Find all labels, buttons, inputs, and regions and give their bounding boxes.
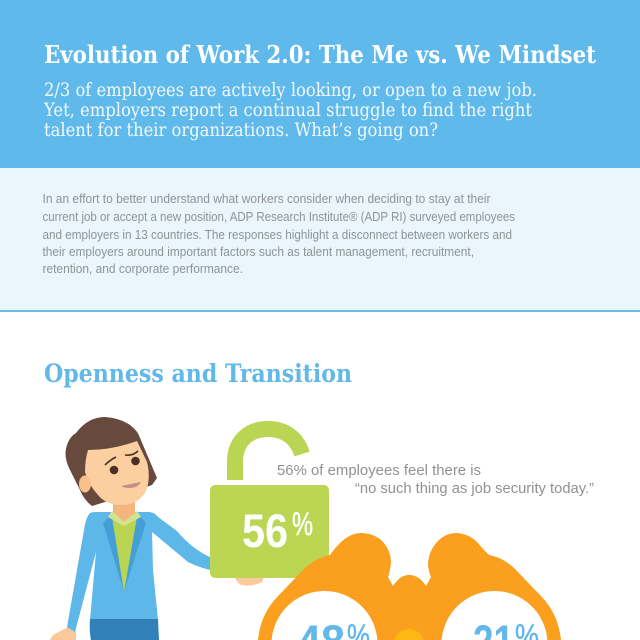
- face: [85, 441, 149, 505]
- left hand: [50, 627, 76, 640]
- trousers: [90, 619, 159, 640]
- subtitle: Yet, employers report a continual struggle to find the right: [43, 100, 532, 121]
- left lens: [272, 591, 377, 640]
- subtitle: talent for their organizations. What’s going on?: [44, 120, 438, 141]
- intro text block: current job or accept a new position, ADP Research Institute® (ADP RI) surveyed employees: [42, 209, 515, 224]
- right lens: [442, 591, 547, 640]
- mouth: [121, 482, 141, 488]
- lapels: [103, 513, 146, 592]
- subtitle: [43, 80, 537, 141]
- panel: header band: [0, 0, 640, 168]
- lock label: %: [292, 506, 313, 542]
- eyebrows: [105, 451, 138, 465]
- intro text block: their employers around important factors such as talent management, recruitment,: [42, 244, 474, 259]
- ear: [79, 476, 91, 492]
- intro text block: [42, 191, 515, 276]
- neck: [113, 502, 135, 524]
- icon: padlock 56%: [210, 429, 329, 586]
- jacket: [67, 512, 210, 632]
- binocular body: [258, 533, 561, 640]
- intro text block: In an effort to better understand what workers consider when deciding to stay at their: [42, 191, 491, 206]
- shirt: [112, 517, 137, 592]
- section heading: Openness and Transition: [44, 359, 352, 389]
- quote text: 56% of employees feel there is: [277, 463, 481, 479]
- panel: introduction: [0, 168, 640, 312]
- lock body: [210, 485, 329, 578]
- intro text block: retention, and corporate performance.: [42, 261, 243, 276]
- hair: [66, 417, 157, 506]
- quote text: [277, 463, 594, 497]
- focus wheel: [395, 629, 423, 640]
- eyes: [110, 457, 140, 474]
- supporting hand: [235, 572, 264, 586]
- collar: [108, 511, 141, 526]
- intro text block: and employers in 13 countries. The responses highlight a disconnect between workers and: [42, 227, 512, 242]
- icon: binoculars: [258, 533, 561, 640]
- shackle: [235, 429, 302, 480]
- quote text: “no such thing as job security today.”: [355, 481, 594, 497]
- lock label: 56: [242, 504, 288, 557]
- subtitle: 2/3 of employees are actively looking, or open to a new job.: [44, 80, 537, 101]
- illustration: worried employee: [50, 417, 210, 640]
